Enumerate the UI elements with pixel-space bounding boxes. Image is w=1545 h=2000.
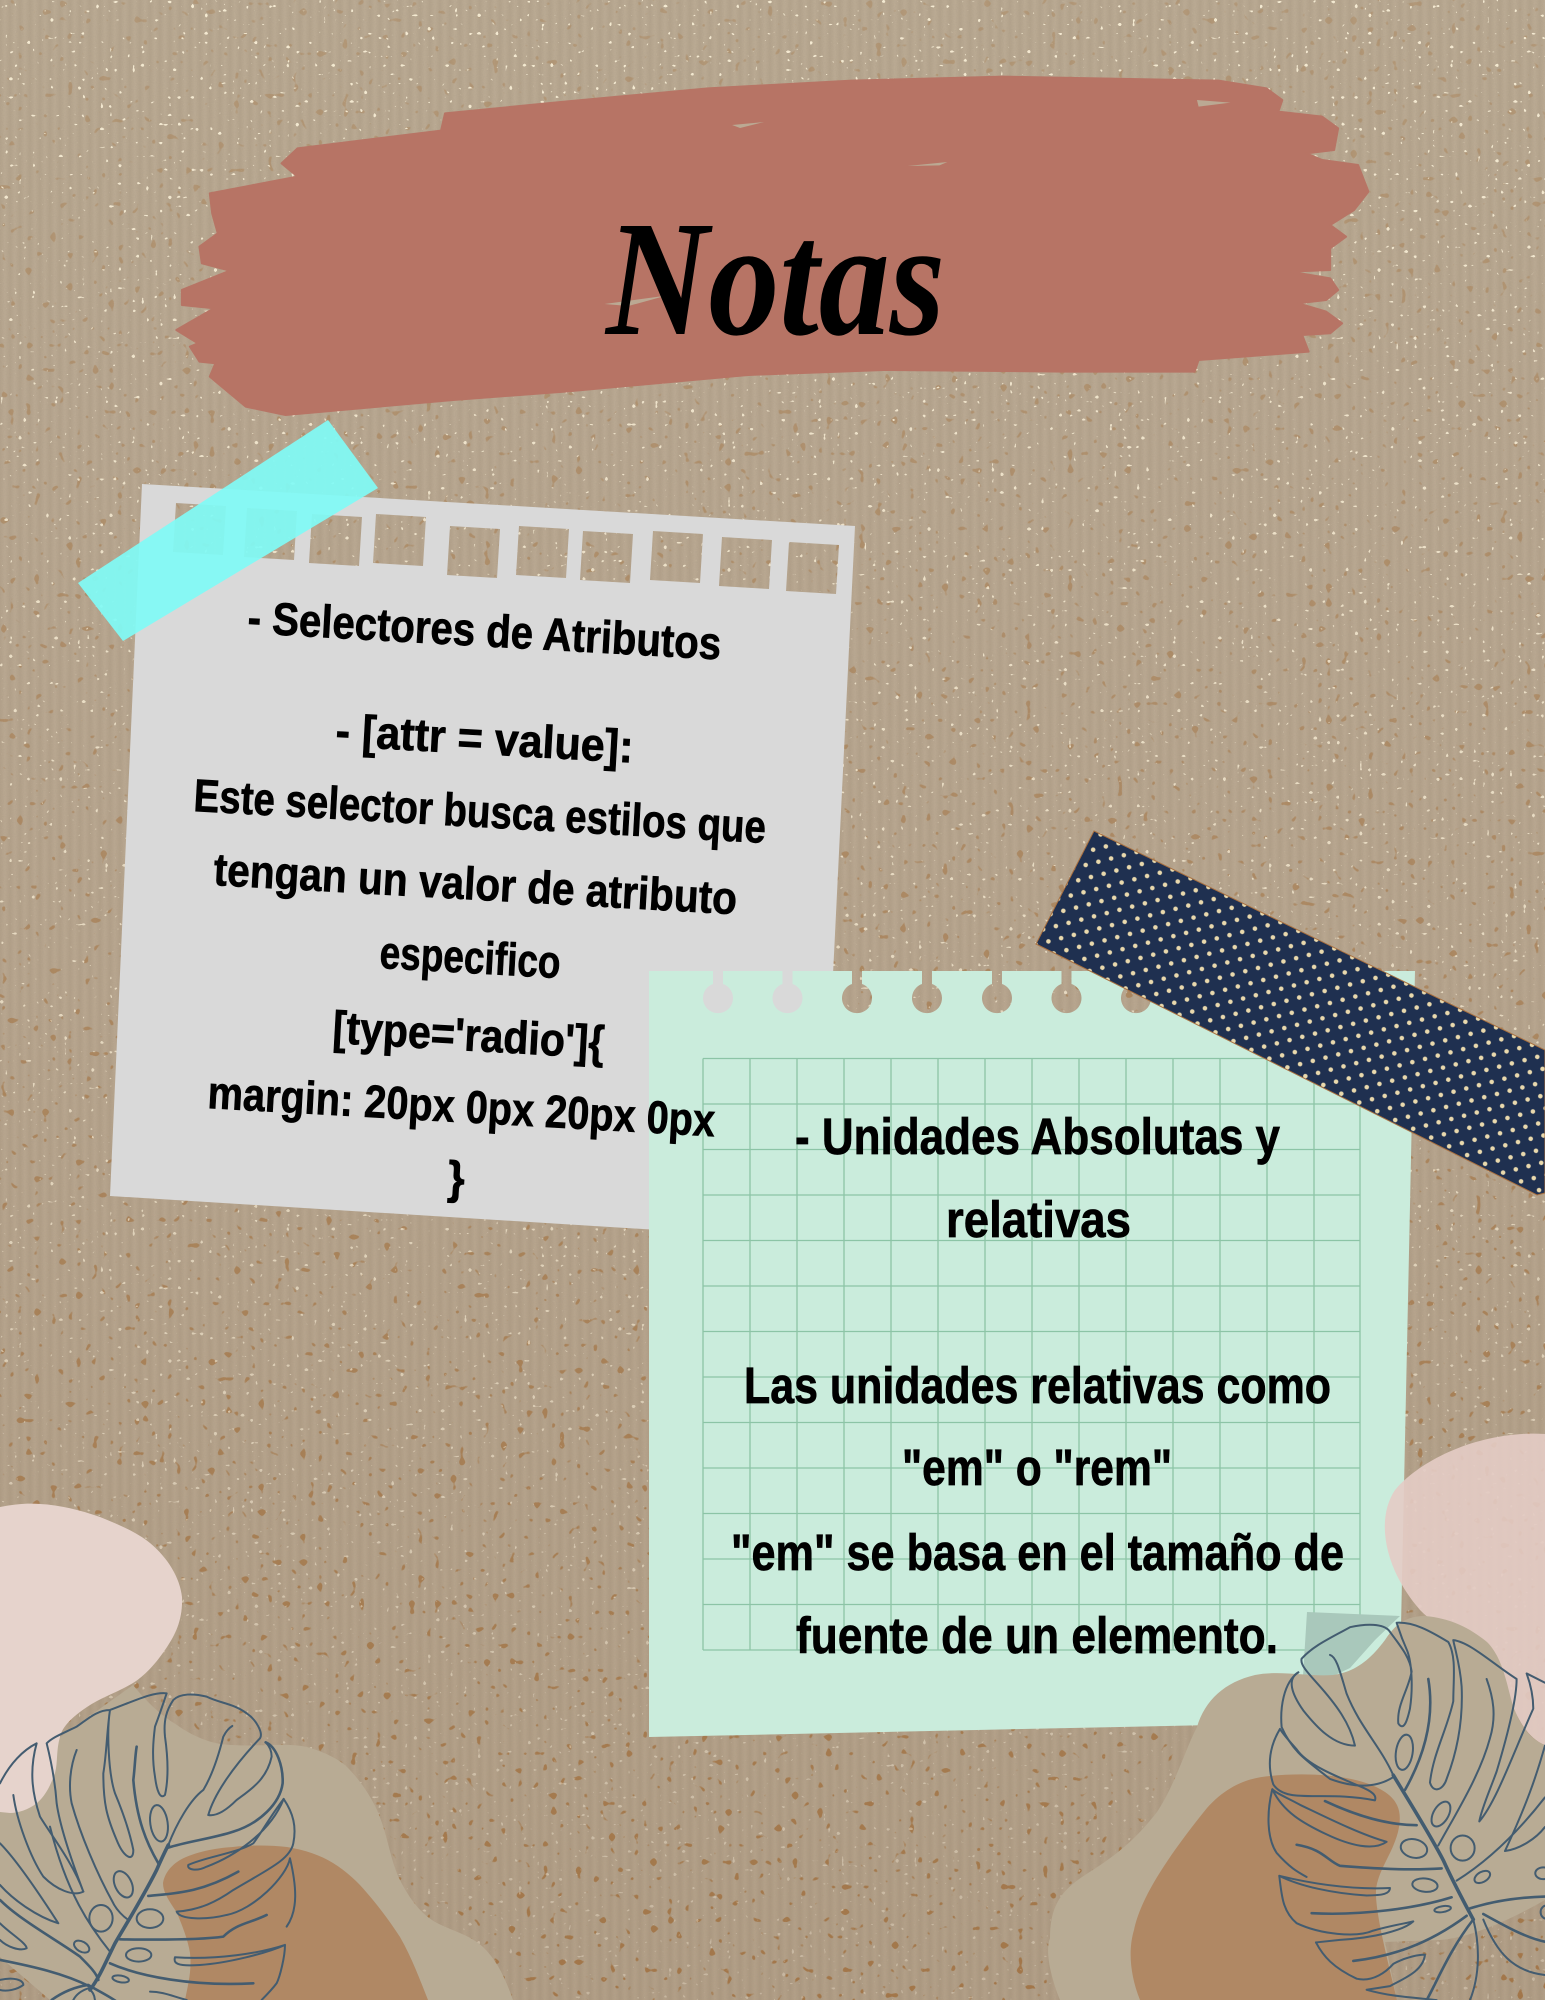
text block: grey note: } [446,1151,466,1204]
text block: mint note: - Unidades Absolutas y [795,1108,1281,1165]
navy polka-dot washi tape [1036,831,1545,1195]
panel: mint grid note with punched holes [649,971,1415,1737]
text block: mint note: fuente de un elemento. [796,1607,1278,1664]
text block: mint note: "em" o "rem" [902,1439,1172,1496]
text block: mint note: "em" se basa en el tamaño de [731,1524,1344,1581]
panel: grey torn note with punched squares [110,484,855,1240]
title brush stroke [176,77,1368,415]
text block: grey note: - [attr = value]: [334,704,635,773]
text block: mint note: Las unidades relativas como [744,1357,1331,1414]
text block: mint note [731,1108,1344,1664]
text block: grey note: [type='radio']{ [331,1001,606,1068]
text block: mint note: relativas [946,1191,1131,1248]
cyan washi tape [78,420,378,641]
text block: grey note: tengan un valor de atributo [212,843,739,924]
blob: right brown [1131,1774,1400,2000]
tinted sheet corner [1303,1612,1400,1676]
note grid [703,1058,1360,1650]
icon: left monstera leaf outline [0,1693,295,2000]
icon: right monstera leaf outline [1268,1623,1545,2000]
text block: grey note: especifico [378,926,562,988]
blob: left beige [0,1685,513,2000]
blob: left pink [0,1504,182,1813]
blob: right beige [1048,1616,1545,2000]
text block: grey note: margin: 20px 0px 20px 0px [206,1066,717,1146]
title: Notas: Notas [604,187,945,370]
blob: left brown [163,1846,428,2000]
text block: grey note: - Selectores de Atributos [246,591,723,669]
text block: grey note [192,591,767,1204]
blob: right pink [1385,1434,1545,1745]
text block: grey note: Este selector busca estilos que [192,769,767,853]
